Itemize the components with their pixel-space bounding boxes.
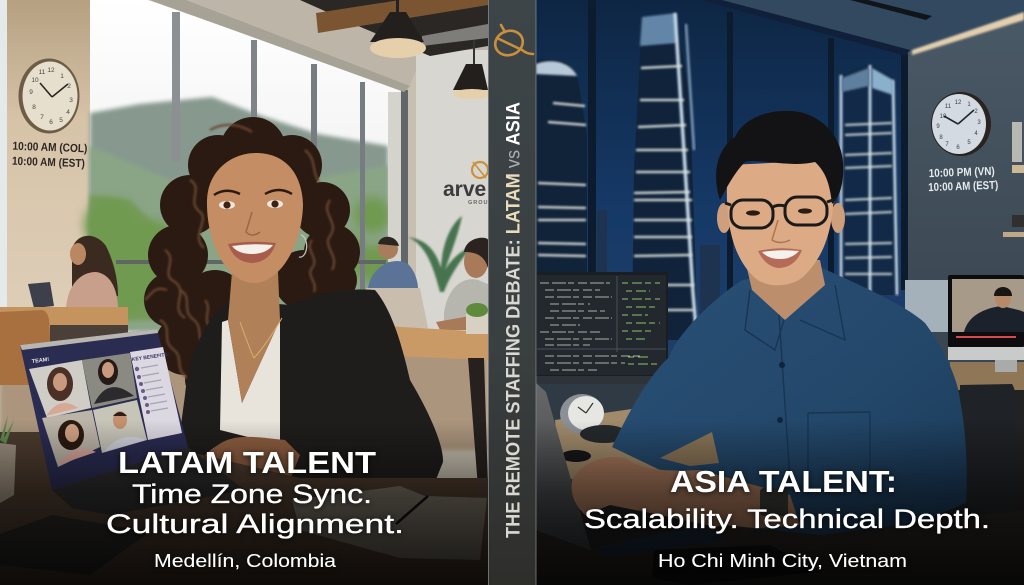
pillar — [7, 0, 90, 340]
desk clock — [560, 394, 604, 434]
time labels VN — [928, 166, 999, 194]
monitor stand area — [536, 384, 646, 424]
wall clock VN: 5 — [967, 140, 971, 146]
phone on desk — [652, 545, 820, 585]
ceiling — [700, 0, 1024, 54]
window mullions — [588, 0, 910, 342]
shirt buttons — [777, 362, 785, 423]
glasses — [725, 197, 836, 228]
wall clock VN: 10 — [940, 114, 947, 120]
wall clock VN: 8 — [939, 135, 943, 141]
back silver screen — [905, 280, 950, 332]
upper wall and sloped trim — [187, 0, 488, 90]
open laptop on back table — [366, 288, 428, 330]
wall clock COL: 12 — [47, 67, 55, 74]
spine panel — [488, 0, 536, 585]
back left table — [0, 307, 128, 325]
time labels COL: 10:00 AM (EST) — [12, 156, 85, 170]
video tile 3 — [42, 410, 100, 467]
dark tablet — [0, 515, 150, 575]
center spine divider — [488, 0, 536, 585]
sidebar key benefits — [130, 347, 182, 440]
wall clock VN: 11 — [945, 104, 952, 110]
man hands — [572, 457, 800, 530]
arve group wall logo: arve — [443, 178, 486, 201]
video tile 4 — [93, 400, 147, 453]
window with mountain view — [84, 0, 408, 340]
man face — [727, 160, 834, 285]
wall clock COL: 10 — [31, 77, 39, 84]
blazer — [175, 290, 443, 492]
wall clock VN: 7 — [945, 142, 949, 148]
back right table — [394, 326, 488, 360]
plant — [408, 216, 472, 292]
man nose and smile — [758, 220, 802, 268]
desk — [555, 405, 720, 480]
woman forearm and hands — [205, 436, 300, 476]
pot plant left — [0, 415, 16, 503]
blouse — [220, 320, 280, 445]
spine logo — [492, 25, 533, 59]
table leg — [468, 358, 488, 488]
man hair — [716, 111, 843, 204]
panel: LATAM office scene — [0, 0, 493, 585]
laptop keyboard — [595, 525, 730, 558]
neck and chest — [228, 272, 280, 403]
back wall — [0, 0, 488, 478]
watch — [760, 488, 788, 516]
subheading line 2: Cultural Alignment. — [106, 509, 404, 539]
cove light — [912, 12, 1024, 55]
shirt pocket and placket — [745, 285, 870, 480]
ceiling duct — [422, 24, 488, 46]
man eyes — [746, 208, 812, 216]
pendant lamp 2 — [453, 40, 491, 99]
wooden beam — [316, 0, 488, 33]
arve group wall logo — [444, 160, 488, 204]
central tower — [632, 12, 698, 340]
arve group wall logo: GROUP — [468, 200, 493, 206]
background person: man in grey — [436, 238, 488, 330]
wall clock VN: 3 — [977, 120, 981, 126]
distant buildings — [597, 210, 720, 315]
time labels VN: 10:00 PM (VN) — [929, 166, 995, 180]
time labels COL: 10:00 AM (COL) — [12, 141, 88, 155]
neck — [745, 260, 825, 320]
wall clock COL: 3 — [69, 97, 73, 104]
small potted plant — [466, 303, 488, 334]
subheading Asia: Scalability. Technical Depth. — [584, 504, 990, 534]
wall clock VN: 4 — [974, 131, 978, 137]
skyscraper left — [536, 59, 587, 272]
keyboard and mouse — [561, 425, 628, 462]
wall clock VN: 2 — [974, 109, 978, 115]
face — [207, 153, 307, 283]
chair back — [960, 384, 1018, 540]
back desk — [950, 362, 1024, 390]
ceiling spot track — [850, 0, 932, 20]
right monitor — [948, 275, 1024, 372]
desk patch between arm and torso — [660, 432, 719, 466]
left monitor with code — [536, 272, 668, 384]
wall clock VN: 6 — [956, 145, 960, 151]
left edge window strip — [0, 0, 7, 307]
video tile 2 — [82, 353, 137, 408]
location LATAM: Medellín, Colombia — [154, 550, 337, 571]
main desk — [0, 432, 488, 585]
bottom fade — [0, 420, 488, 585]
wall clock COL: 2 — [67, 83, 71, 90]
wall clock COL: 5 — [59, 117, 63, 124]
video tile 1 — [29, 360, 91, 418]
spine edge lines — [488, 0, 536, 585]
woman hair — [144, 117, 360, 400]
wall clock COL: 11 — [39, 69, 46, 76]
necklace — [240, 318, 282, 358]
laptop — [536, 383, 725, 585]
wall clock COL — [18, 58, 80, 134]
sidebar key benefits: KEY BENEFITS: — [131, 352, 170, 363]
right tower — [838, 63, 900, 295]
wall clock VN: 1 — [967, 102, 971, 108]
window top frame — [700, 0, 910, 56]
table legs and shadows — [50, 325, 128, 342]
subheading line 1: Time Zone Sync. — [132, 479, 372, 509]
heading Asia: ASIA TALENT: — [670, 464, 897, 499]
wall clock COL: 7 — [40, 114, 44, 121]
bottom desk — [536, 510, 1024, 585]
wall shelves — [1003, 122, 1024, 237]
concrete wall — [908, 12, 1024, 380]
wall clock VN: 12 — [955, 100, 962, 106]
man body shirt — [612, 268, 967, 540]
right wall — [416, 50, 488, 340]
time labels COL — [12, 141, 88, 170]
team app label: TEAM! — [32, 357, 50, 365]
wall clock COL: 6 — [49, 119, 53, 126]
wall clock COL: 4 — [66, 109, 70, 116]
wall clock COL: 8 — [32, 104, 36, 111]
wall clock COL: 9 — [29, 89, 33, 96]
pendant lamp 1 — [370, 0, 426, 58]
night window — [536, 0, 908, 400]
floor — [0, 356, 488, 452]
background person: left — [28, 236, 118, 310]
heading LATAM: LATAM TALENT — [118, 445, 376, 480]
open notebook — [292, 486, 487, 560]
spine title: THE REMOTE STAFFING DEBATE: LATAM vs ASIA — [504, 102, 524, 538]
pen — [396, 496, 428, 524]
bottom fade — [536, 420, 1024, 585]
panel: Asia office scene — [536, 0, 1024, 585]
wall clock VN — [931, 92, 991, 156]
location Asia: Ho Chi Minh City, Vietnam — [658, 550, 907, 571]
chair — [0, 310, 50, 385]
ears — [717, 203, 845, 233]
laptop — [20, 329, 245, 515]
time labels VN: 10:00 AM (EST) — [928, 180, 999, 194]
dark ceiling — [300, 0, 488, 56]
wall clock COL: 1 — [60, 73, 64, 80]
background person: man in blue — [368, 237, 418, 288]
wall clock VN: 9 — [936, 124, 940, 130]
